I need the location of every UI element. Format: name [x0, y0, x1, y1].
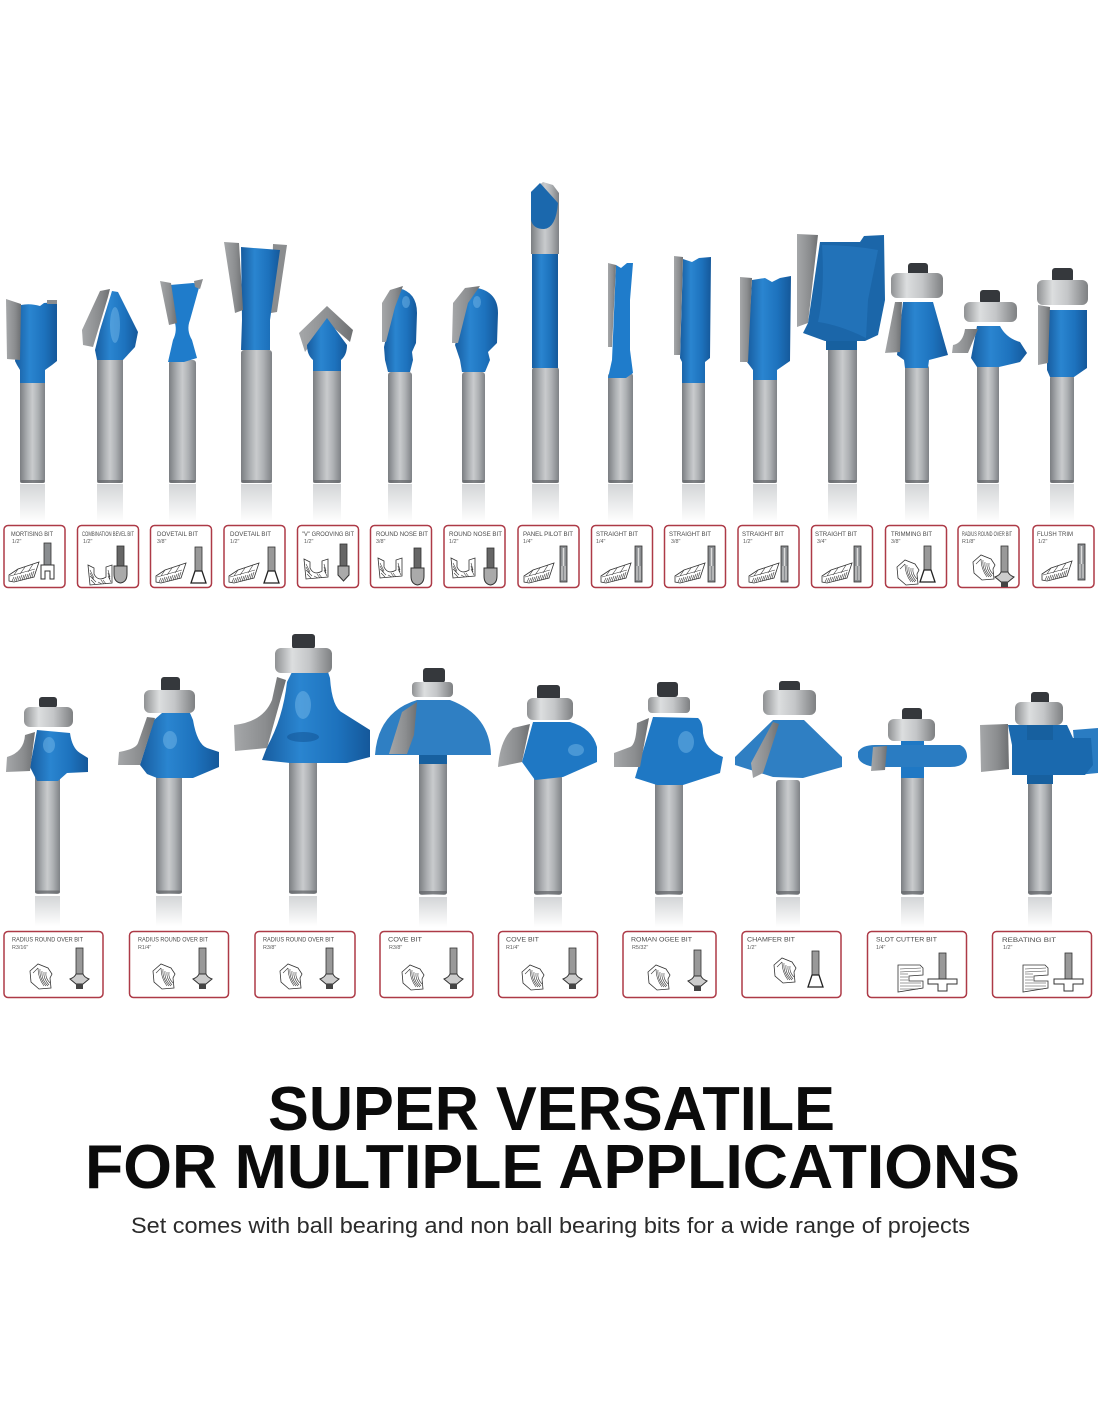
- label: cove 3/8: R3/8": [389, 945, 402, 951]
- label: round nose 3/8: [370, 526, 432, 588]
- bit: roman ogee: [614, 682, 723, 927]
- label: cove 1/4: COVE BIT: [506, 936, 539, 944]
- label: trimming: 3/8": [891, 539, 900, 545]
- bit: radius round over R3/8: [234, 634, 370, 926]
- label: mortising: 1/2": [12, 539, 21, 545]
- label: rebating: 1/2": [1003, 945, 1012, 951]
- bit: mortising: [6, 299, 57, 522]
- label: round nose 1/2: [444, 526, 505, 588]
- title: FOR MULTIPLE APPLICATIONS: [85, 1133, 1020, 1202]
- label: rebating: [992, 932, 1092, 998]
- bit: dovetail 1/2: [224, 242, 287, 522]
- label: dovetail 1/2: DOVETAIL BIT: [230, 531, 271, 538]
- label: panel pilot: 1/4": [523, 539, 532, 545]
- label: radius round over R1/8: R1/8": [962, 539, 975, 545]
- label: V grooving: "V" GROOVING BIT: [302, 531, 354, 538]
- label: straight 1/4: STRAIGHT BIT: [596, 531, 638, 538]
- label: radius round over R1/8: [958, 526, 1019, 588]
- bit: dovetail 3/8: [160, 279, 203, 522]
- label: radius round over R1/4: RADIUS ROUND OVER BIT: [138, 936, 208, 944]
- bit: round nose 3/8: [382, 286, 417, 522]
- label: trimming: TRIMMING BIT: [891, 531, 932, 538]
- label: flush trim: FLUSH TRIM: [1037, 531, 1073, 538]
- label: straight 1/4: 1/4": [596, 539, 605, 545]
- label: combination bevel: 1/2": [83, 539, 92, 545]
- label: radius round over R1/4: [130, 932, 228, 998]
- label: roman ogee: R5/32": [632, 945, 648, 951]
- bit: straight 1/4: [608, 263, 633, 522]
- label: radius round over R1/4: R1/4": [138, 945, 151, 951]
- label: radius round over R3/8: R3/8": [263, 945, 276, 951]
- label: round nose 3/8: 3/8": [376, 539, 385, 545]
- label: rebating: REBATING BIT: [1002, 937, 1056, 944]
- label: straight 3/4: [812, 526, 872, 588]
- label: straight 1/2: STRAIGHT BIT: [742, 531, 784, 538]
- label: radius round over R3/16: R3/16": [12, 945, 28, 951]
- label: chamfer: CHAMFER BIT: [747, 936, 795, 944]
- label: straight 3/4: 3/4": [817, 539, 826, 545]
- bit: slot cutter: [858, 708, 967, 927]
- bit: cove 1/4: [498, 685, 597, 927]
- label: slot cutter: 1/4": [876, 945, 885, 951]
- label: slot cutter: [868, 932, 966, 998]
- label: straight 3/8: STRAIGHT BIT: [669, 531, 711, 538]
- label: radius round over R3/8: [255, 932, 355, 998]
- bit: radius round over R1/4: [118, 677, 219, 926]
- label: combination bevel: [78, 526, 138, 588]
- label: dovetail 3/8: DOVETAIL BIT: [157, 531, 198, 538]
- bit: cove 3/8: [375, 668, 491, 927]
- bit: straight 3/8: [674, 256, 711, 522]
- bit: rebating: [980, 692, 1098, 927]
- label: straight 1/2: [738, 526, 799, 588]
- bit: straight 3/4: [797, 234, 885, 522]
- label: radius round over R3/16: [4, 932, 103, 998]
- label: cove 1/4: R1/4": [506, 945, 519, 951]
- label: round nose 1/2: 1/2": [449, 539, 458, 545]
- label: slot cutter: SLOT CUTTER BIT: [876, 936, 937, 944]
- bit: flush trim: [1037, 268, 1088, 522]
- label: mortising: MORTISING BIT: [11, 531, 53, 538]
- bit: straight 1/2: [740, 276, 791, 522]
- label: V grooving: [298, 526, 358, 588]
- label: straight 1/2: 1/2": [743, 539, 752, 545]
- label: dovetail 3/8: 3/8": [157, 539, 166, 545]
- bit: combination bevel: [82, 289, 138, 522]
- label: flush trim: [1033, 526, 1094, 588]
- label: trimming: [886, 526, 946, 588]
- bit: V grooving: [299, 306, 353, 522]
- label: flush trim: 1/2": [1038, 539, 1047, 545]
- label: cove 3/8: COVE BIT: [388, 936, 422, 944]
- label: straight 3/8: 3/8": [671, 539, 680, 545]
- label: cove 3/8: [380, 932, 473, 998]
- bit: panel pilot: [531, 182, 559, 522]
- label: roman ogee: [623, 932, 716, 998]
- label: panel pilot: PANEL PILOT BIT: [523, 531, 573, 538]
- label: dovetail 1/2: 1/2": [230, 539, 239, 545]
- label: dovetail 3/8: [150, 526, 212, 588]
- bit: round nose 1/2: [452, 286, 498, 522]
- bit: radius round over R1/8: [952, 290, 1027, 522]
- label: straight 3/8: [664, 526, 726, 588]
- label: radius round over R3/8: RADIUS ROUND OVER BIT: [263, 936, 334, 944]
- label: chamfer: 1/2": [747, 945, 756, 951]
- bit: radius round over R3/16: [6, 697, 88, 926]
- bit: chamfer: [735, 681, 842, 927]
- label: combination bevel: COMBINATION BEVEL BIT: [82, 531, 134, 538]
- title: SUPER VERSATILE: [268, 1075, 835, 1144]
- label: roman ogee: ROMAN OGEE BIT: [631, 936, 692, 944]
- label: mortising: [4, 526, 65, 588]
- label: round nose 1/2: ROUND NOSE BIT: [449, 531, 502, 538]
- subtitle: Set comes with ball bearing and non ball bearing bits for a wide range of projects: [131, 1213, 970, 1238]
- label: radius round over R3/16: RADIUS ROUND OVER BIT: [12, 936, 83, 944]
- label: chamfer: [742, 932, 841, 998]
- label: straight 3/4: STRAIGHT BIT: [815, 531, 857, 538]
- label: cove 1/4: [498, 932, 598, 998]
- label: straight 1/4: [592, 526, 652, 588]
- bit: trimming: [885, 263, 948, 522]
- title: [85, 1075, 1020, 1202]
- label: round nose 3/8: ROUND NOSE BIT: [376, 531, 428, 538]
- label: radius round over R1/8: RADIUS ROUND OVER BIT: [962, 531, 1012, 538]
- label: V grooving: 1/2": [304, 539, 313, 545]
- label: panel pilot: [518, 526, 579, 588]
- label: dovetail 1/2: [224, 526, 285, 588]
